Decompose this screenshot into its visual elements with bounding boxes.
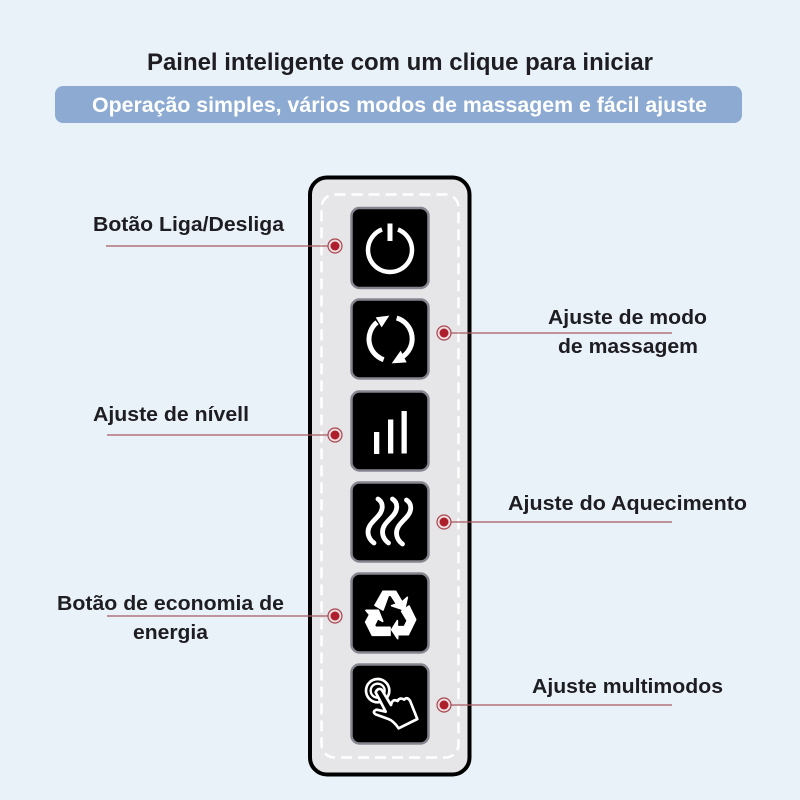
callout: power button	[93, 214, 342, 253]
callout: heating	[437, 493, 747, 529]
callout: massage mode: de massagem	[558, 336, 698, 358]
subtitle banner	[55, 86, 742, 123]
panel stitching	[322, 194, 458, 758]
callout: massage mode	[437, 307, 707, 358]
button: touch hand	[352, 664, 428, 744]
button: power	[352, 208, 428, 288]
button: level bars	[352, 392, 428, 470]
callout: level	[93, 404, 342, 442]
button: heating waves	[352, 482, 428, 562]
control panel	[310, 178, 470, 774]
callout: heating: Ajuste do Aquecimento	[508, 493, 747, 515]
panel body	[310, 178, 470, 774]
callout: energy saving: Botão de economia de	[57, 593, 284, 615]
button: recycle	[352, 574, 428, 652]
callout: level: Ajuste de nívell	[93, 404, 249, 426]
callout: multimode: Ajuste multimodos	[532, 676, 723, 698]
subtitle banner: Operação simples, vários modos de massagem e fácil ajuste	[92, 94, 707, 117]
title: Painel inteligente com um clique para iniciar	[147, 49, 653, 76]
callout: power button: Botão Liga/Desliga	[93, 214, 285, 236]
callout: massage mode: Ajuste de modo	[548, 307, 707, 329]
callout: energy saving: energia	[133, 622, 209, 644]
callout: energy saving	[57, 593, 342, 644]
button: massage mode cycle	[352, 300, 428, 378]
callout: multimode	[437, 676, 723, 712]
